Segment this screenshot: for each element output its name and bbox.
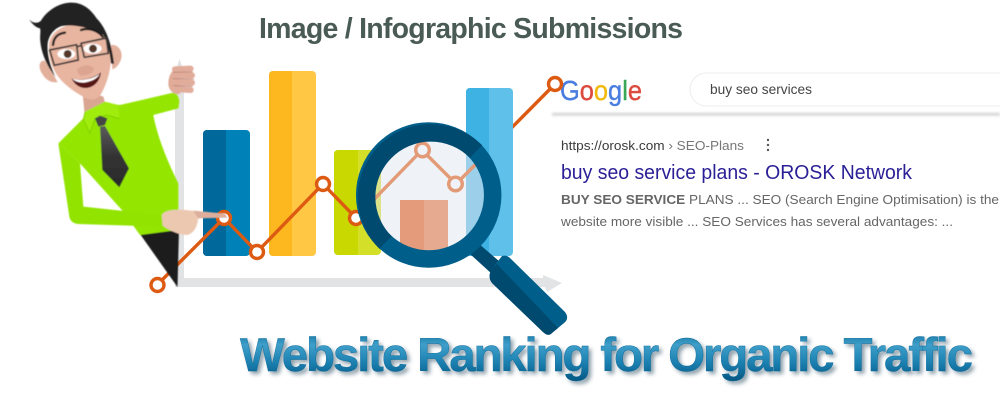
collar fold — [83, 112, 119, 133]
nose — [77, 65, 94, 75]
headline text: Website Ranking for Organic Traffic — [240, 329, 973, 382]
pointing hand — [162, 210, 227, 235]
headline shadow: Website Ranking for Organic Traffic — [243, 332, 976, 385]
magnifying glass — [356, 122, 568, 335]
result snippet: website more visible ... SEO Services has several advantages: ... — [560, 214, 953, 229]
mouth — [72, 72, 101, 88]
trend line — [151, 78, 562, 292]
torso and raised arm — [58, 93, 179, 235]
bar: light blue — [466, 88, 513, 256]
header divider — [552, 113, 1000, 116]
bar: yellow — [269, 71, 316, 256]
neck — [82, 90, 107, 118]
trousers — [140, 228, 179, 287]
result url: https://orosk.com › SEO-Plans — [561, 138, 744, 153]
result snippet — [560, 192, 999, 229]
cartoon businessman — [29, 3, 227, 287]
Google logo: Google — [560, 75, 642, 106]
head — [29, 3, 122, 118]
eyebrows — [53, 29, 103, 45]
chart axes — [175, 59, 562, 292]
bottom headline — [240, 329, 976, 385]
tie — [95, 116, 129, 187]
handle neck — [470, 243, 500, 274]
result title: buy seo service plans - OROSK Network — [561, 162, 913, 184]
lens ring — [365, 131, 493, 259]
result snippet: BUY SEO SERVICE PLANS ... SEO (Search Engine Optimisation) is the — [561, 192, 999, 207]
shirt — [58, 93, 179, 235]
bar: lime — [334, 150, 381, 255]
page title: Image / Infographic Submissions — [259, 13, 683, 45]
lens view — [375, 142, 484, 250]
face — [49, 24, 111, 99]
right ear — [111, 45, 122, 69]
eyes and glasses — [50, 38, 108, 65]
raised hand — [168, 67, 194, 94]
search box — [690, 73, 1000, 106]
left ear — [40, 61, 58, 82]
search result panel — [552, 73, 1000, 229]
collar — [83, 102, 119, 133]
search box: buy seo services — [710, 82, 812, 97]
forearm — [58, 143, 162, 227]
hair — [29, 3, 114, 77]
handle grip — [490, 256, 567, 335]
bar: blue — [203, 130, 250, 256]
